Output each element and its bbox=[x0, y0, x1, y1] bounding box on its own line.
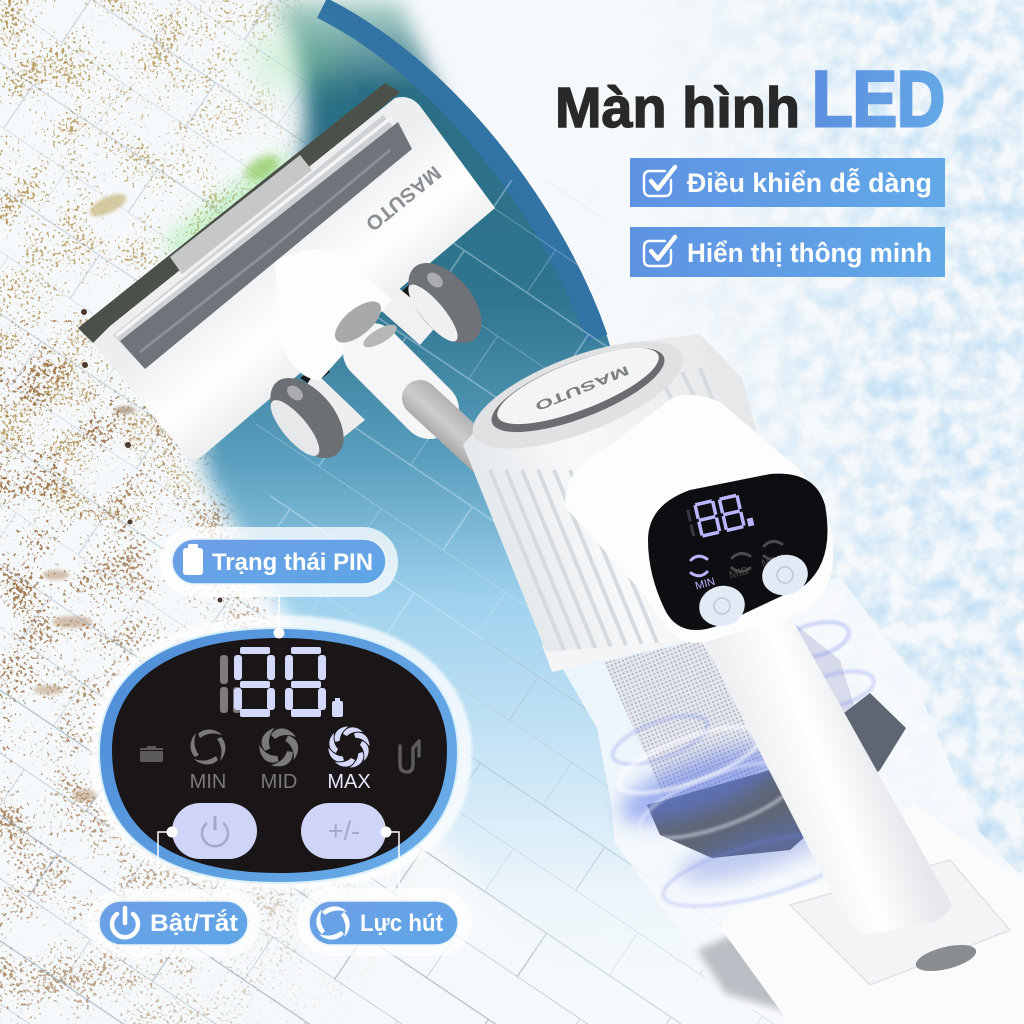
icon: checkbox bbox=[644, 237, 675, 266]
top cap disc bbox=[460, 319, 696, 471]
connector dots bbox=[166, 628, 392, 838]
small plus minus button bbox=[758, 550, 812, 600]
blue glow rings bbox=[607, 615, 878, 921]
translucent bar bbox=[170, 155, 312, 274]
ring collar bbox=[542, 600, 730, 672]
connecting tube bbox=[420, 398, 498, 470]
handle grip bbox=[700, 605, 952, 935]
translucent dust cup bbox=[546, 578, 1024, 1024]
icon: fan max bbox=[325, 723, 373, 771]
vacuum floor nozzle bbox=[78, 83, 498, 471]
power button bbox=[172, 803, 257, 859]
callout: suction: Lực hút bbox=[360, 910, 443, 937]
feature bar: easy control: Điều khiển dễ dàng bbox=[687, 167, 932, 198]
mode labels: MIN bbox=[190, 771, 226, 793]
brand name on nozzle: MASUTO bbox=[361, 161, 445, 235]
title: Màn hình bbox=[555, 76, 800, 140]
grey sensor oval bbox=[913, 940, 979, 976]
icon: checkbox bbox=[644, 167, 675, 196]
small LED display bbox=[648, 474, 828, 631]
small power button bbox=[695, 581, 749, 631]
shadow gaps under nozzle bbox=[300, 284, 420, 386]
title: LED bbox=[812, 54, 945, 143]
panel black face bbox=[112, 638, 447, 873]
panel blue rim bbox=[99, 628, 458, 883]
callout: battery status: Trạng thái PIN bbox=[212, 549, 373, 576]
plus minus button: +/- bbox=[328, 816, 360, 846]
callout: power: Bật/Tắt bbox=[150, 909, 238, 937]
icon: fan min bbox=[191, 730, 225, 764]
brand name on cap: MASUTO bbox=[533, 363, 631, 414]
icon: floor hook bbox=[400, 741, 419, 772]
icon: fan mid bbox=[254, 725, 302, 772]
dark inner cone bbox=[647, 693, 906, 858]
centre neck housing bbox=[275, 250, 392, 380]
wire mesh filter bbox=[604, 620, 880, 815]
digit display bbox=[220, 647, 343, 717]
callout: suction bbox=[297, 888, 472, 956]
dirty floor with debris bbox=[0, 0, 588, 1024]
nozzle body bbox=[93, 97, 495, 459]
icon: power bbox=[112, 908, 138, 937]
background wall texture bbox=[689, 0, 1024, 874]
small LED display: MID bbox=[728, 565, 751, 582]
vacuum main body bbox=[460, 319, 1024, 1024]
icon: battery bbox=[183, 544, 203, 575]
connecting sleeve bbox=[372, 352, 430, 410]
handle head bbox=[565, 395, 833, 643]
pivot joint bbox=[328, 294, 388, 350]
icon: fan bbox=[316, 906, 350, 940]
green glow from nozzle light bbox=[170, 30, 340, 250]
brush drum window bbox=[113, 115, 412, 367]
feature bar: easy control bbox=[630, 158, 945, 207]
clean floor beam bbox=[0, 0, 786, 1024]
LED panel enlarged: MAX bbox=[327, 771, 371, 793]
LED panel enlarged: MID bbox=[261, 771, 297, 793]
icon: dust box bbox=[140, 746, 163, 762]
callout: battery status bbox=[160, 527, 398, 597]
callout: power bbox=[87, 889, 260, 957]
title bbox=[555, 54, 945, 143]
base plate bbox=[78, 83, 400, 350]
small mode labels: MIN bbox=[694, 576, 717, 593]
small digits bbox=[685, 491, 754, 540]
base block bbox=[722, 803, 1024, 1024]
small fan MIN bbox=[691, 556, 707, 576]
rear wheel left bbox=[256, 365, 365, 471]
panel halo bbox=[90, 615, 472, 890]
feature bar: smart display: Hiển thị thông minh bbox=[687, 238, 932, 268]
LED panel enlarged bbox=[90, 595, 472, 903]
plus minus button bbox=[301, 803, 386, 859]
feature bar: smart display bbox=[630, 227, 945, 277]
small fan MID and MAX bbox=[732, 541, 782, 572]
motor housing with ribs bbox=[463, 334, 770, 652]
rear wheel right bbox=[375, 250, 496, 356]
small LED display: MAX bbox=[760, 552, 787, 570]
callout connectors bbox=[158, 595, 399, 903]
